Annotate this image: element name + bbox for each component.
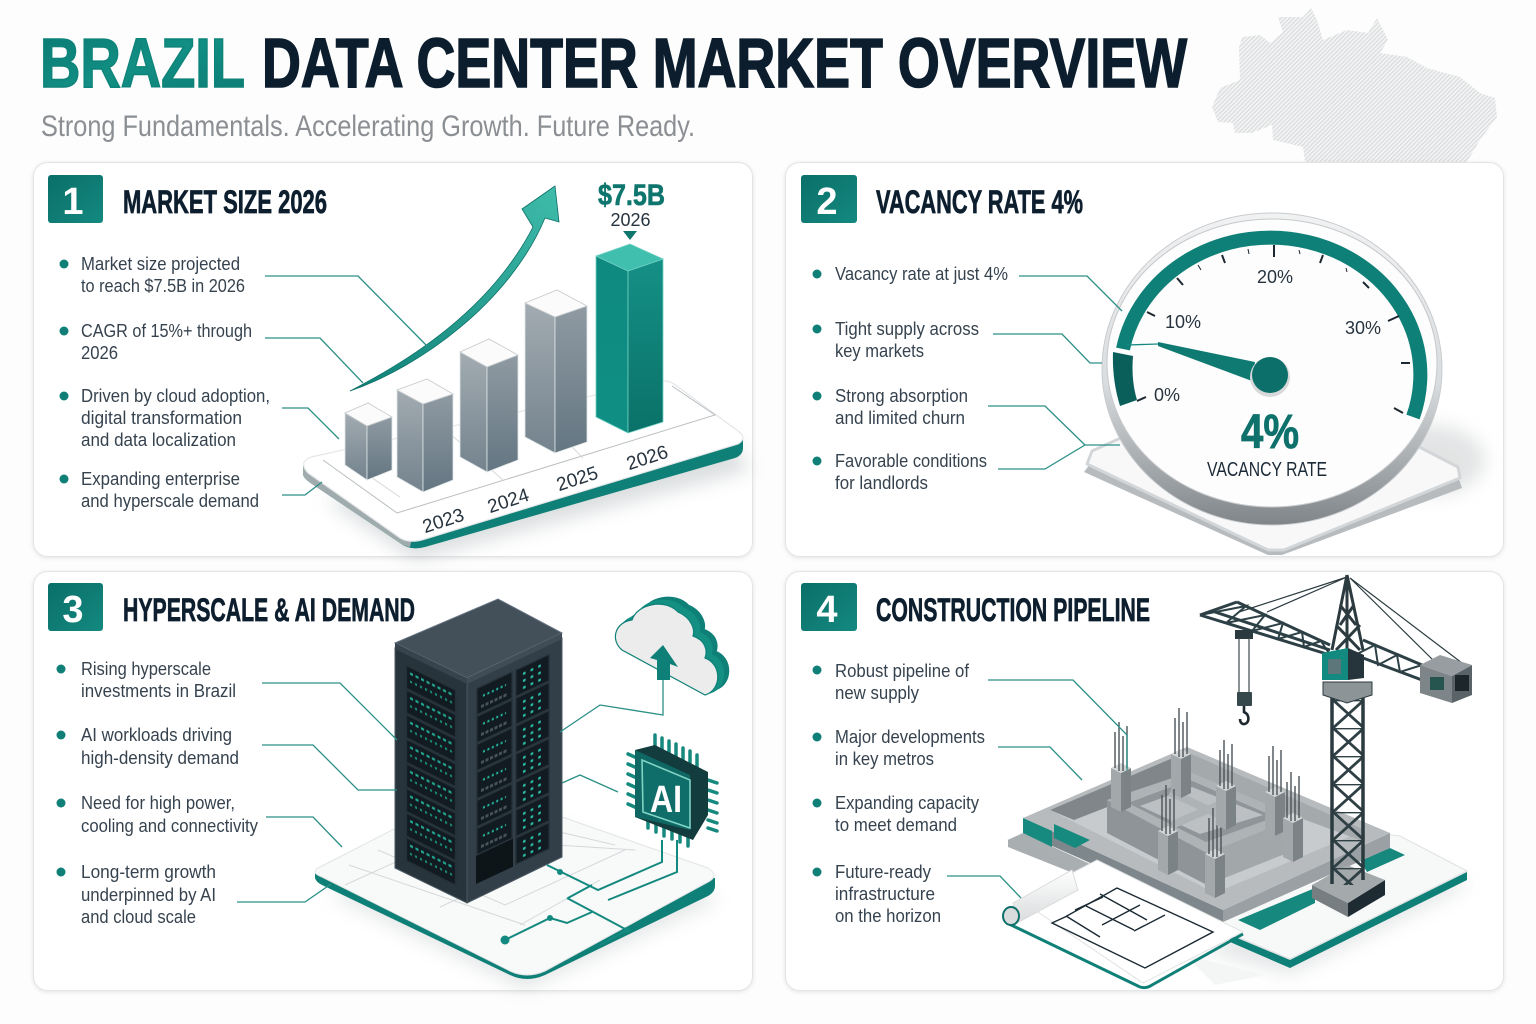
panel 1 badge: 1 xyxy=(62,181,84,223)
panel 4 bullets: on the horizon xyxy=(835,906,941,926)
panel 3 bullets: AI workloads driving xyxy=(81,725,232,745)
gauge low segment xyxy=(1113,352,1137,406)
panel 1 bullets: to reach $7.5B in 2026 xyxy=(81,276,245,296)
value callout: $7.5B xyxy=(598,179,665,212)
gauge ticks xyxy=(1137,245,1410,413)
panel 1 bullets: Expanding enterprise xyxy=(81,469,240,489)
crane hook xyxy=(1235,630,1253,724)
value callout xyxy=(598,179,665,240)
panel 4 heading: CONSTRUCTION PIPELINE xyxy=(876,592,1150,628)
panel 2 connectors xyxy=(988,276,1122,469)
panel 2: vacancy rate xyxy=(786,162,1504,556)
panel 1 bullets: CAGR of 15%+ through xyxy=(81,321,252,341)
panel 2 badge xyxy=(801,175,857,223)
panel 1 heading: MARKET SIZE 2026 xyxy=(123,184,327,220)
AI chip icon xyxy=(628,735,717,846)
gauge scale labels: 0% xyxy=(1154,385,1180,405)
crane base xyxy=(1312,865,1385,917)
growth arrow xyxy=(350,186,559,391)
panel 4 bullets: in key metros xyxy=(835,749,934,769)
panel 3 connectors xyxy=(237,680,663,902)
gauge scale labels: 10% xyxy=(1165,312,1201,332)
panel 3 bullets xyxy=(56,659,258,927)
year axis labels: 2024 xyxy=(485,485,532,518)
crane mast xyxy=(1323,682,1372,885)
panel 2 bullets: and limited churn xyxy=(835,408,965,428)
rack top xyxy=(395,599,562,678)
tower crane xyxy=(1200,575,1472,917)
concrete foundation xyxy=(1023,747,1390,922)
panel 2 bullets xyxy=(812,264,1008,493)
rebar columns xyxy=(1111,708,1303,898)
bar 2024 xyxy=(397,379,453,492)
circuit traces xyxy=(502,840,677,945)
panel 1 bullets: and data localization xyxy=(81,430,236,450)
panel 3 bullets: Long-term growth xyxy=(81,862,216,882)
panel 2 bullets: for landlords xyxy=(835,473,928,493)
panel 1 bullets: Driven by cloud adoption, xyxy=(81,386,270,406)
year axis labels: 2025 xyxy=(554,463,601,496)
AI chip icon: AI xyxy=(650,779,682,821)
panel 1 bullets: digital transformation xyxy=(81,408,242,428)
panel 3 card xyxy=(34,572,752,990)
gauge scale labels xyxy=(1154,267,1381,405)
bar chart xyxy=(345,244,663,492)
rack left servers xyxy=(405,664,457,887)
panel 1 bullets: and hyperscale demand xyxy=(81,491,259,511)
panel 4 card xyxy=(786,572,1504,990)
subtitle: Strong Fundamentals. Accelerating Growth. Future Ready. xyxy=(41,110,695,143)
crane peak xyxy=(1239,575,1462,663)
panel 2 bullets: Vacancy rate at just 4% xyxy=(835,264,1008,284)
panel 3 bullets: underpinned by AI xyxy=(81,885,216,905)
gauge teal arc xyxy=(1123,238,1420,417)
title: DATA CENTER MARKET OVERVIEW xyxy=(262,24,1187,102)
cloud upload arrow xyxy=(650,645,678,680)
gauge dial xyxy=(1102,213,1442,525)
gauge scale labels: 20% xyxy=(1257,267,1293,287)
panel 3 bullets: and cloud scale xyxy=(81,907,196,927)
panel 4 badge: 4 xyxy=(816,589,838,631)
crane counterweight xyxy=(1420,655,1472,703)
crane jib xyxy=(1200,602,1422,680)
panel 4 bullets: infrastructure xyxy=(835,884,935,904)
bar 2023 xyxy=(345,403,392,480)
cloud icon xyxy=(615,598,728,695)
panel 4 bullets xyxy=(812,661,985,926)
panel 3 platform xyxy=(315,788,720,990)
crane cab xyxy=(1322,648,1364,680)
panel 4 bullets: Robust pipeline of xyxy=(835,661,970,681)
panel 3 bullets: investments in Brazil xyxy=(81,681,236,701)
panel 1: market size xyxy=(34,162,752,560)
panel 1 connectors xyxy=(265,276,427,495)
year axis labels xyxy=(420,442,671,538)
panel 4 bullets: to meet demand xyxy=(835,815,957,835)
panel 4 bullets: Future-ready xyxy=(835,862,931,882)
panel 1 badge xyxy=(48,175,103,223)
panel 3 bullets: cooling and connectivity xyxy=(81,816,258,836)
title xyxy=(40,24,1187,102)
title: BRAZIL xyxy=(40,24,245,102)
panel 3 bullets: high-density demand xyxy=(81,748,239,768)
panel 3 badge: 3 xyxy=(62,589,84,631)
panel 4: construction xyxy=(786,572,1504,990)
panel 2 bullets: Strong absorption xyxy=(835,386,968,406)
panel 4 connectors xyxy=(947,680,1127,898)
panel 4 bullets: Expanding capacity xyxy=(835,793,979,813)
server rack xyxy=(395,599,562,903)
panel 3 badge xyxy=(48,583,103,631)
gauge base plate xyxy=(1084,370,1485,555)
construction ground slab xyxy=(1008,800,1470,975)
panel 4 bullets: new supply xyxy=(835,683,919,703)
Brazil map watermark xyxy=(1212,8,1497,162)
gauge needle xyxy=(1127,342,1290,397)
panel 2 card xyxy=(786,162,1504,556)
year axis labels: 2026 xyxy=(624,442,671,475)
panel 3 bullets: Rising hyperscale xyxy=(81,659,211,679)
panel 2 badge: 2 xyxy=(816,181,838,223)
panel 1 bullets xyxy=(60,254,270,511)
bar 2026 xyxy=(596,244,663,433)
panel 1 bullets: 2026 xyxy=(81,343,118,363)
panel 1 bullets: Market size projected xyxy=(81,254,240,274)
panel 1 card xyxy=(34,162,752,556)
year axis labels: 2023 xyxy=(420,505,467,538)
panel 2 bullets: Favorable conditions xyxy=(835,451,987,471)
panel 3: hyperscale and AI xyxy=(34,572,752,990)
bar 2025 b xyxy=(525,290,587,453)
panel 2 heading: VACANCY RATE 4% xyxy=(876,184,1083,220)
rack right servers xyxy=(476,653,550,884)
blueprint xyxy=(1003,860,1265,988)
panel 3 heading: HYPERSCALE & AI DEMAND xyxy=(123,592,415,628)
value callout: 2026 xyxy=(610,210,651,230)
panel 2 bullets: key markets xyxy=(835,341,924,361)
gauge value: 4% xyxy=(1241,406,1299,459)
bar 2025 a xyxy=(460,339,518,472)
panel 2 bullets: Tight supply across xyxy=(835,319,979,339)
panel 1 platform xyxy=(303,381,750,560)
gauge scale labels: 30% xyxy=(1345,318,1381,338)
panel 4 bullets: Major developments xyxy=(835,727,985,747)
floor plan xyxy=(1052,888,1213,968)
gauge label: VACANCY RATE xyxy=(1207,459,1327,481)
inner walls xyxy=(1107,800,1207,885)
panel 4 badge xyxy=(801,583,857,631)
panel 3 bullets: Need for high power, xyxy=(81,793,235,813)
